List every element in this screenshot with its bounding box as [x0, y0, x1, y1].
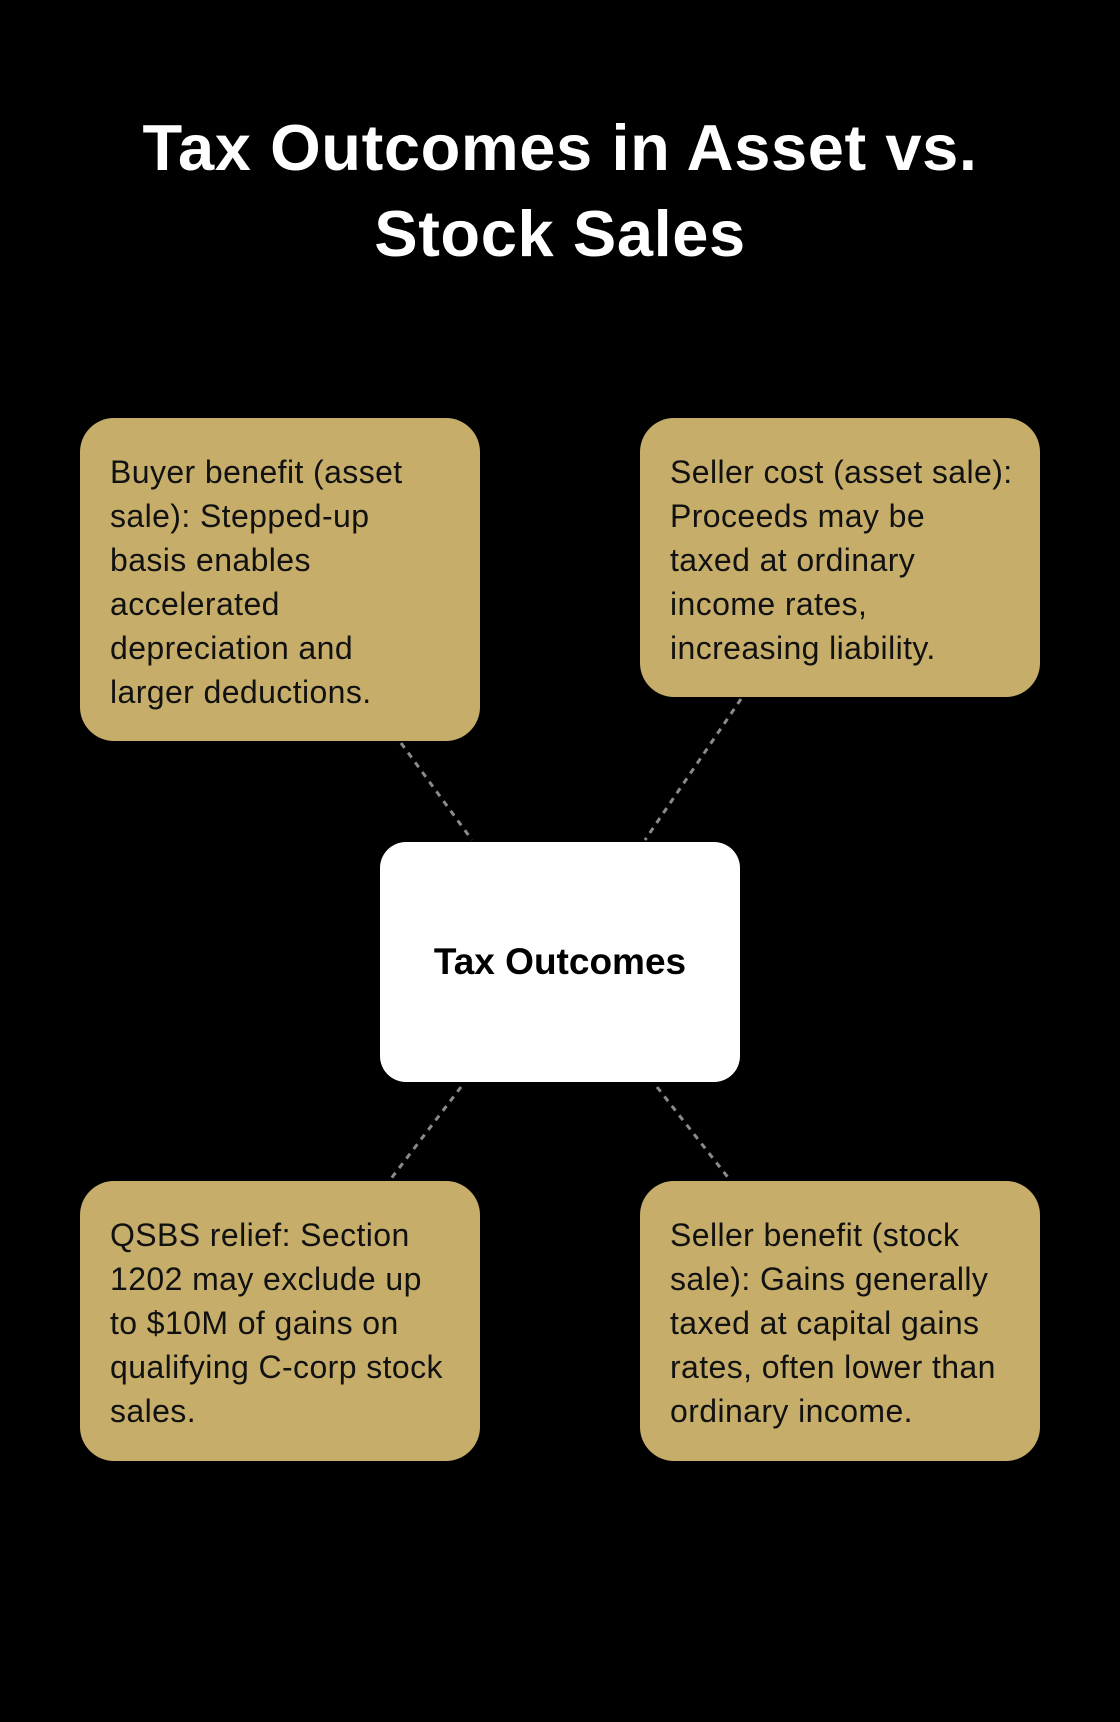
panel: seller benefit: ordinary income.: [670, 1393, 913, 1429]
center node: [380, 842, 740, 1082]
panel: seller benefit: taxed at capital gains: [670, 1305, 979, 1341]
panel: seller cost: taxed at ordinary: [670, 542, 915, 578]
panel: seller cost: [640, 418, 1040, 697]
panel: seller benefit: rates, often lower than: [670, 1349, 996, 1385]
panel: seller cost: Seller cost (asset sale):: [670, 454, 1013, 490]
panel: buyer benefit: basis enables: [110, 542, 311, 578]
panel: QSBS relief: qualifying C-corp stock: [110, 1349, 443, 1385]
panel: buyer benefit: depreciation and: [110, 630, 353, 666]
panel: buyer benefit: accelerated: [110, 586, 280, 622]
panel: seller benefit: [640, 1181, 1040, 1461]
panel: QSBS relief: sales.: [110, 1393, 196, 1429]
panel: seller benefit: Seller benefit (stock: [670, 1217, 959, 1253]
panel: seller cost: increasing liability.: [670, 630, 936, 666]
panel: seller benefit: sale): Gains generally: [670, 1261, 988, 1297]
panel: QSBS relief: QSBS relief: Section: [110, 1217, 410, 1253]
panel: buyer benefit: sale): Stepped-up: [110, 498, 369, 534]
panel: buyer benefit: [80, 418, 480, 741]
panel: buyer benefit: larger deductions.: [110, 674, 372, 710]
title: Stock Sales: [374, 197, 746, 270]
center node: Tax Outcomes: [434, 941, 686, 982]
title: [142, 111, 978, 270]
title: Tax Outcomes in Asset vs.: [142, 111, 978, 184]
panel: seller cost: income rates,: [670, 586, 867, 622]
panel: buyer benefit: Buyer benefit (asset: [110, 454, 403, 490]
panel: seller cost: Proceeds may be: [670, 498, 925, 534]
panel: QSBS relief: to $10M of gains on: [110, 1305, 399, 1341]
panel: QSBS relief: 1202 may exclude up: [110, 1261, 422, 1297]
panel: QSBS relief: [80, 1181, 480, 1461]
